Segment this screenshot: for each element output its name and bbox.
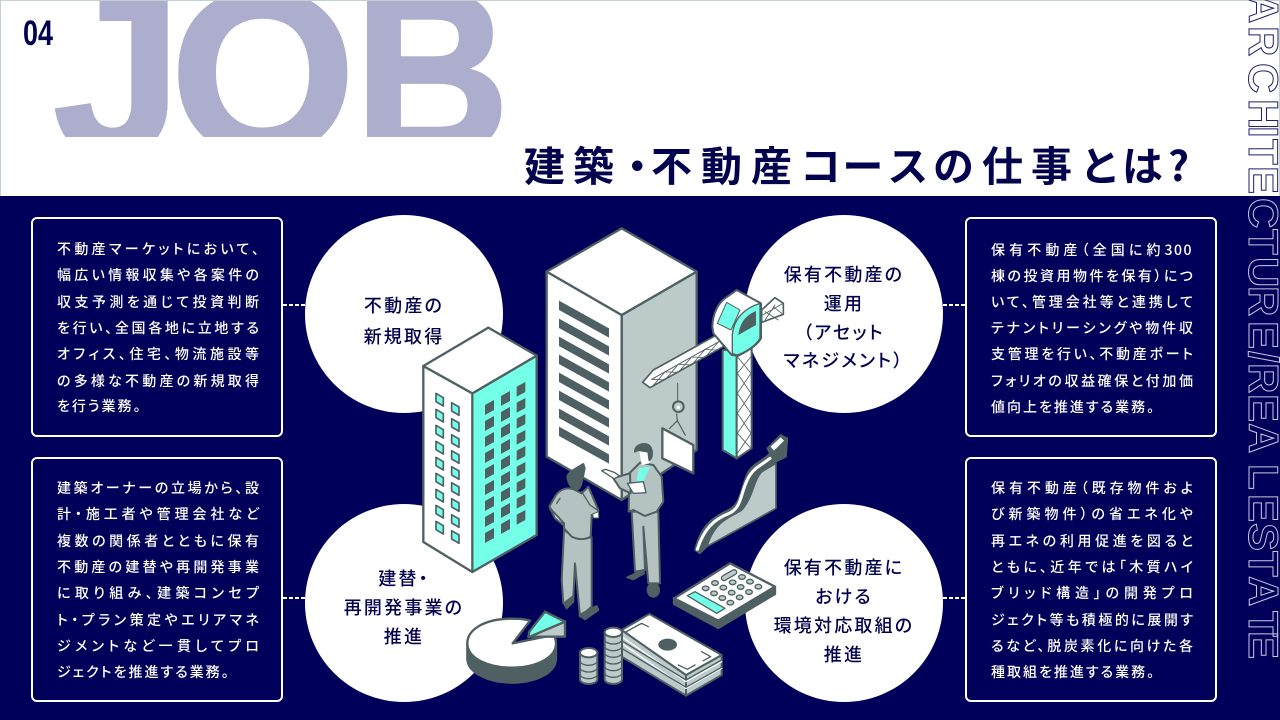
panel: new acquisition description: 不動産マーケットにおいて、 [57, 239, 259, 259]
panel: redevelopment description: ト・プラン策定やエリアマネ [57, 610, 259, 630]
panel: environmental description: るなど、脱炭素化に向けた各 [991, 636, 1193, 656]
icon: banknote stack [622, 614, 722, 696]
panel: new acquisition description: オフィス、住宅、物流施設等 [57, 344, 259, 364]
panel: redevelopment description [31, 457, 283, 702]
circle: asset management: 保有不動産の [784, 261, 904, 287]
page frame and header background [0, 0, 1280, 196]
panel: redevelopment description: 建築オーナーの立場から、設 [57, 478, 259, 498]
panel: environmental description: ともに、近年では「木質ハイ [991, 557, 1193, 577]
panel: asset management description: 支管理を行い、不動産ポート [991, 344, 1193, 364]
panel: environmental description: 再エネの利用促進を図ると [991, 531, 1193, 551]
panel: asset management description: 保有不動産（全国に約300 [991, 240, 1193, 260]
connector top right [943, 304, 965, 306]
panel: new acquisition description: の多様な不動産の新規取得 [57, 371, 259, 391]
connector top left [283, 304, 305, 306]
icon: tall office building [547, 228, 697, 500]
panel: environmental description: 種取組を推進する業務。 [991, 662, 1156, 682]
panel: redevelopment description: ジメントなど一貫してプロ [57, 636, 259, 656]
circle: new acquisition [305, 215, 503, 413]
panel: redevelopment description: 計・施工者や管理会社など [57, 504, 259, 524]
panel: asset management description: 棟の投資用物件を保有）につ [991, 266, 1193, 286]
circle: redevelopment [305, 504, 503, 702]
panel: asset management description: テナントリーシングや物件収 [991, 318, 1193, 338]
panel: redevelopment description: ジェクトを推進する業務。 [57, 662, 231, 682]
panel: new acquisition description: を行い、全国各地に立地する [57, 318, 259, 338]
icon: calculator [674, 563, 775, 628]
panel: redevelopment description: 複数の関係者とともに保有 [57, 531, 259, 551]
panel: asset management description [965, 217, 1217, 437]
icon: small apartment building [423, 328, 537, 572]
panel: environmental description: 保有不動産（既存物件およ [991, 478, 1193, 498]
circle: new acquisition: 新規取得 [364, 323, 444, 349]
circle: asset management: （アセット [803, 319, 885, 345]
panel: asset management description: いて、管理会社等と連携して [991, 292, 1193, 312]
panel: asset management description: フォリオの収益確保と付加価 [991, 371, 1193, 391]
icon: tower crane [643, 290, 783, 473]
icon: coin stacks [580, 628, 622, 684]
icon: man viewed from behind [549, 464, 599, 619]
circle: environmental: 保有不動産に [784, 554, 904, 580]
panel: asset management description: 値向上を推進する業務。 [991, 397, 1156, 417]
icon: rising arrow chart [695, 435, 787, 553]
panel: new acquisition description [31, 217, 283, 437]
panel: environmental description: ブリッド構造」の開発プロ [991, 583, 1193, 603]
circle: redevelopment: 建替・ [378, 565, 430, 591]
panel: new acquisition description: 収支予測を通じて投資判断 [57, 292, 259, 312]
connector bottom left [283, 597, 305, 599]
panel: redevelopment description: に取り組み、建築コンセプ [57, 583, 259, 603]
circle: environmental: 推進 [824, 641, 864, 667]
panel: environmental description: ジェクト等も積極的に展開す [991, 610, 1193, 630]
circle: asset management [745, 215, 943, 413]
circle: redevelopment: 推進 [384, 623, 424, 649]
circle: environmental: おける [815, 583, 873, 609]
circle: asset management: マネジメント） [784, 347, 904, 373]
panel: environmental description [965, 457, 1217, 702]
icon: pie chart [467, 612, 565, 683]
circle: redevelopment: 再開発事業の [344, 594, 464, 620]
panel: new acquisition description: を行う業務。 [57, 396, 143, 416]
circle: environmental: 環境対応取組の [774, 612, 914, 638]
panel: environmental description: び新築物件）の省エネ化や [991, 504, 1193, 524]
icon: man with documents [602, 444, 663, 597]
big JOB heading [54, 1, 502, 137]
circle: new acquisition: 不動産の [364, 292, 444, 318]
connector bottom right [943, 597, 965, 599]
panel: new acquisition description: 幅広い情報収集や各案件の [57, 265, 259, 285]
circle: asset management: 運用 [824, 290, 864, 316]
panel: redevelopment description: 不動産の建替や再開発事業 [57, 557, 259, 577]
circle: environmental [745, 504, 943, 702]
navy main panel [0, 196, 1280, 720]
